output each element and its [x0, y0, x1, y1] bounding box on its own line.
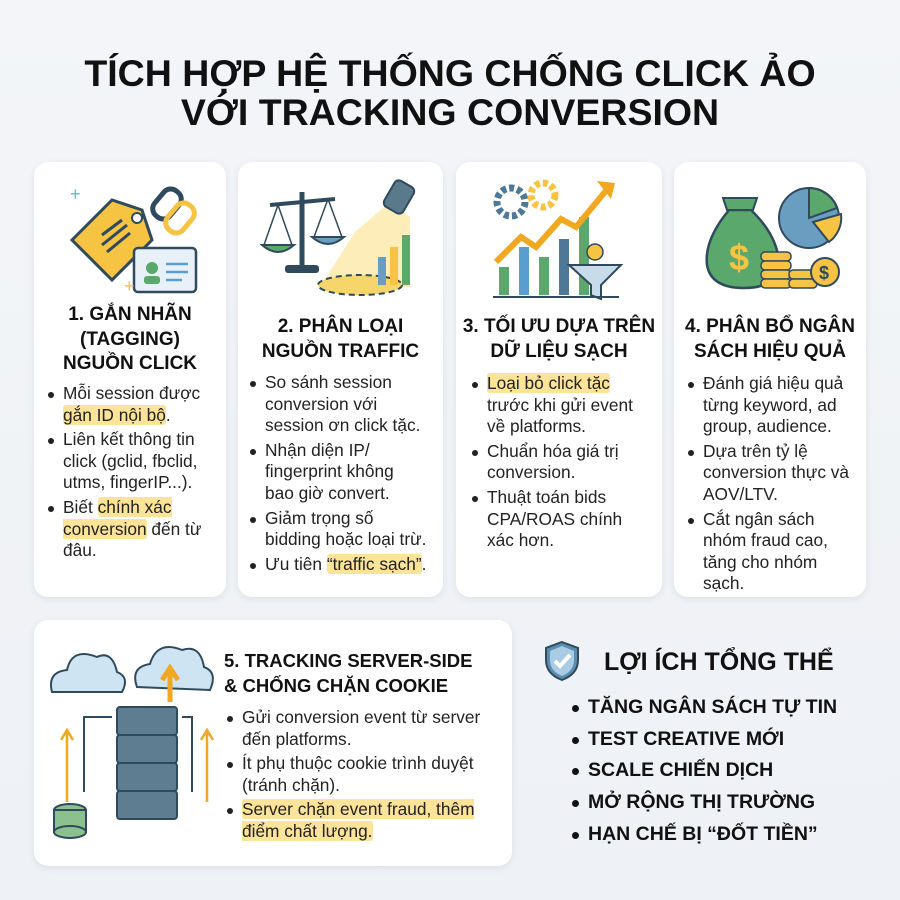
panel: overall benefits [545, 640, 837, 845]
heading [463, 314, 655, 362]
heading [63, 302, 197, 374]
bullets: Server chặn event fraud, thêm điểm chất lượng. [242, 799, 474, 841]
heading [224, 650, 472, 696]
bullets: So sánh session conversion với session ơn click tặc. [265, 372, 420, 435]
title: VỚI TRACKING CONVERSION [181, 91, 719, 133]
heading: 3. TỐI ƯU DỰA TRÊN [463, 316, 655, 337]
bullets [227, 707, 480, 841]
heading: NGUỒN CLICK [63, 353, 197, 374]
panel: budget allocation [674, 162, 866, 597]
bullets: Loại bỏ click tặc trước khi gửi event về platforms. [487, 373, 633, 436]
heading: SÁCH HIỆU QUẢ [694, 340, 846, 362]
bullets: Gửi conversion event từ server đến platforms. [242, 707, 480, 749]
panel: optimize clean data [456, 162, 662, 597]
bullets: Giảm trọng số bidding hoặc loại trừ. [265, 508, 426, 549]
benefit list: TĂNG NGÂN SÁCH TỰ TIN [588, 696, 837, 718]
panel: tagging [34, 162, 226, 597]
bullets: Biết chính xác conversion đến từ đâu. [63, 497, 201, 560]
heading: (TAGGING) [80, 328, 180, 350]
bullets [250, 372, 426, 574]
benefit list: MỞ RỘNG THỊ TRƯỜNG [588, 791, 815, 813]
benefit list: SCALE CHIẾN DỊCH [588, 759, 773, 781]
bullets: Ưu tiên “traffic sạch”. [265, 554, 426, 574]
bullets [48, 383, 201, 560]
bullets: Thuật toán bids CPA/ROAS chính xác hơn. [487, 487, 622, 550]
panel: server-side tracking [34, 620, 512, 866]
heading: NGUỒN TRAFFIC [262, 340, 419, 362]
bullets: Đánh giá hiệu quả từng keyword, ad group, audience. [703, 373, 843, 436]
heading: DỮ LIỆU SẠCH [490, 340, 628, 362]
benefit list: TEST CREATIVE MỚI [588, 728, 784, 750]
icon: tag and link: + [70, 184, 81, 204]
heading [685, 314, 855, 362]
title [84, 52, 816, 133]
panel: traffic classification [238, 162, 443, 597]
icon: tag and link: + [124, 276, 135, 296]
icon: money bag, coins, pie: $ [819, 263, 829, 283]
icon: money bag, coins, pie: $ [729, 237, 749, 278]
heading: 4. PHÂN BỔ NGÂN [685, 316, 855, 337]
bullets: Cắt ngân sách nhóm fraud cao, tăng cho nhóm sạch. [703, 509, 828, 593]
heading: 5. TRACKING SERVER-SIDE [224, 650, 472, 671]
benefit list [572, 696, 837, 845]
icon: scale and spotlight [260, 179, 416, 296]
benefit list: HẠN CHẾ BỊ “ĐỐT TIỀN” [588, 823, 818, 845]
bullets: Dựa trên tỷ lệ conversion thực và AOV/LTV. [703, 441, 849, 504]
bullets: Chuẩn hóa giá trị conversion. [487, 441, 619, 482]
bullets: Nhận diện IP/ fingerprint không bao giờ convert. [265, 440, 394, 503]
heading: LỢI ÍCH TỔNG THỂ [604, 648, 834, 676]
heading [262, 314, 419, 362]
icon: chart with gears and funnel [493, 180, 624, 300]
icon: shield check [545, 640, 579, 682]
bullets: Ít phụ thuộc cookie trình duyệt (tránh chặn). [242, 753, 474, 795]
bullets: Liên kết thông tin click (gclid, fbclid, utms, fingerIP...). [63, 429, 197, 492]
icon: tag and link [70, 184, 198, 296]
heading: & CHỐNG CHẶN COOKIE [224, 674, 448, 696]
heading: 1. GẮN NHÃN [68, 304, 192, 325]
bullets [472, 373, 633, 550]
icon: money bag, coins, pie [705, 187, 842, 290]
heading: 2. PHÂN LOẠI [278, 316, 403, 337]
bullets [688, 373, 849, 593]
bullets: Mỗi session được gắn ID nội bộ. [63, 383, 200, 425]
icon: server and clouds [50, 646, 214, 839]
title: TÍCH HỢP HỆ THỐNG CHỐNG CLICK ẢO [84, 52, 816, 94]
